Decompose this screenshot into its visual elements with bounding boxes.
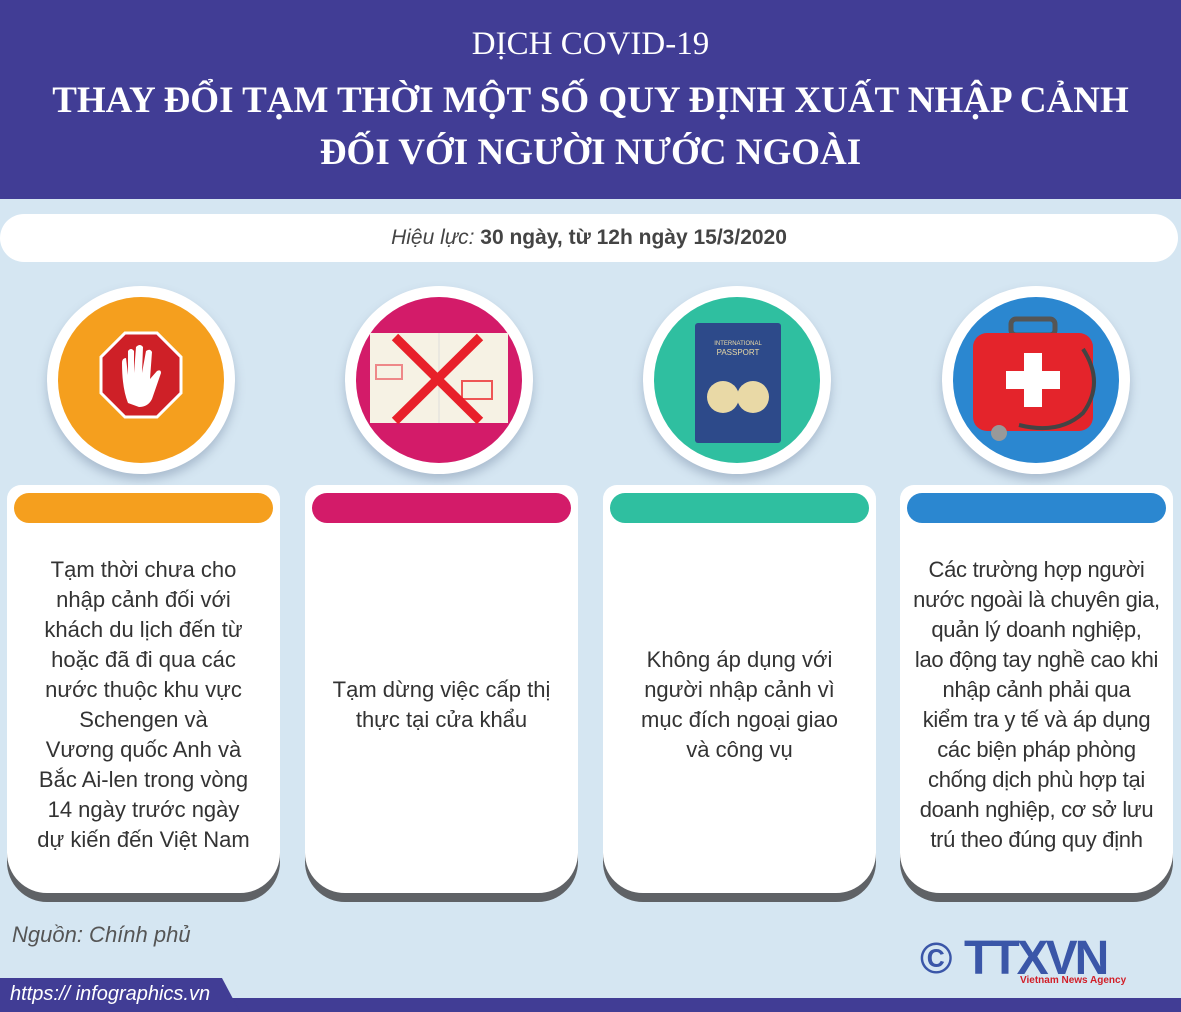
text 4: quản lý doanh nghiệp, [931,617,1142,642]
title main: ĐỐI VỚI NGƯỜI NƯỚC NGOÀI [320,132,861,173]
text 4: kiểm tra y tế và áp dụng [923,707,1150,732]
text 1: nước thuộc khu vực [45,677,242,702]
title line 1: DỊCH COVID-19 [472,26,709,62]
text 3: mục đích ngoại giao [641,707,838,732]
text 2: thực tại cửa khẩu [356,707,527,732]
text 3: và công vụ [686,737,793,762]
title main [52,78,1129,173]
text 2: Tạm dừng việc cấp thị [333,677,550,702]
text 1: 14 ngày trước ngày [48,797,239,822]
text 1: Schengen và [79,707,208,732]
icon: passport: INTERNATIONAL [714,341,762,347]
logo TTXVN: TTXVN [964,932,1106,985]
text 3: Không áp dụng với [647,647,832,672]
text 4: chống dịch phù hợp tại [928,767,1145,792]
text 4: lao động tay nghề cao khi [915,647,1158,672]
text 2 [333,677,550,732]
icon: passport: PASSPORT [717,348,760,357]
title main: THAY ĐỔI TẠM THỜI MỘT SỐ QUY ĐỊNH XUẤT NHẬP CẢNH [52,80,1129,121]
effective date pill [0,214,1178,262]
footer url tab [0,978,232,1004]
header [0,0,1181,199]
text 1: dự kiến đến Việt Nam [37,827,250,852]
text 1: Vương quốc Anh và [46,737,241,762]
panel: card 3 [603,485,876,893]
text 1: Tạm thời chưa cho [51,557,236,582]
text 3: người nhập cảnh vì [644,677,835,702]
text 4 [913,557,1160,852]
icon: crossed visa [345,286,533,474]
text 4: trú theo đúng quy định [930,827,1143,852]
logo TTXVN: Vietnam News Agency [1020,975,1126,986]
effective date pill: Hiệu lực: 30 ngày, từ 12h ngày 15/3/2020 [391,226,787,249]
panel: card 1 [7,485,280,893]
logo TTXVN: © [920,934,952,983]
text 1: hoặc đã đi qua các [51,647,236,672]
icon: passport [643,286,831,474]
text 3 [641,647,838,762]
logo TTXVN [920,932,1126,986]
footer bar [0,998,1181,1012]
source: Nguồn: Chính phủ [12,922,191,947]
text 4: doanh nghiệp, cơ sở lưu [920,797,1153,822]
text 1 [37,557,250,852]
text 1: nhập cảnh đối với [56,587,231,612]
text 1: khách du lịch đến từ [44,617,243,642]
footer url tab: https:// infographics.vn [10,983,210,1005]
icon: medical kit [942,286,1130,474]
text 1: Bắc Ai-len trong vòng [39,767,248,792]
text 4: các biện pháp phòng [937,737,1136,762]
panel: card 2 [305,485,578,893]
text 4: Các trường hợp người [929,557,1144,582]
text 4: nước ngoài là chuyên gia, [913,587,1160,612]
panel: card 4 [900,485,1173,893]
icon: stop hand [47,286,235,474]
text 4: nhập cảnh phải qua [943,677,1130,702]
